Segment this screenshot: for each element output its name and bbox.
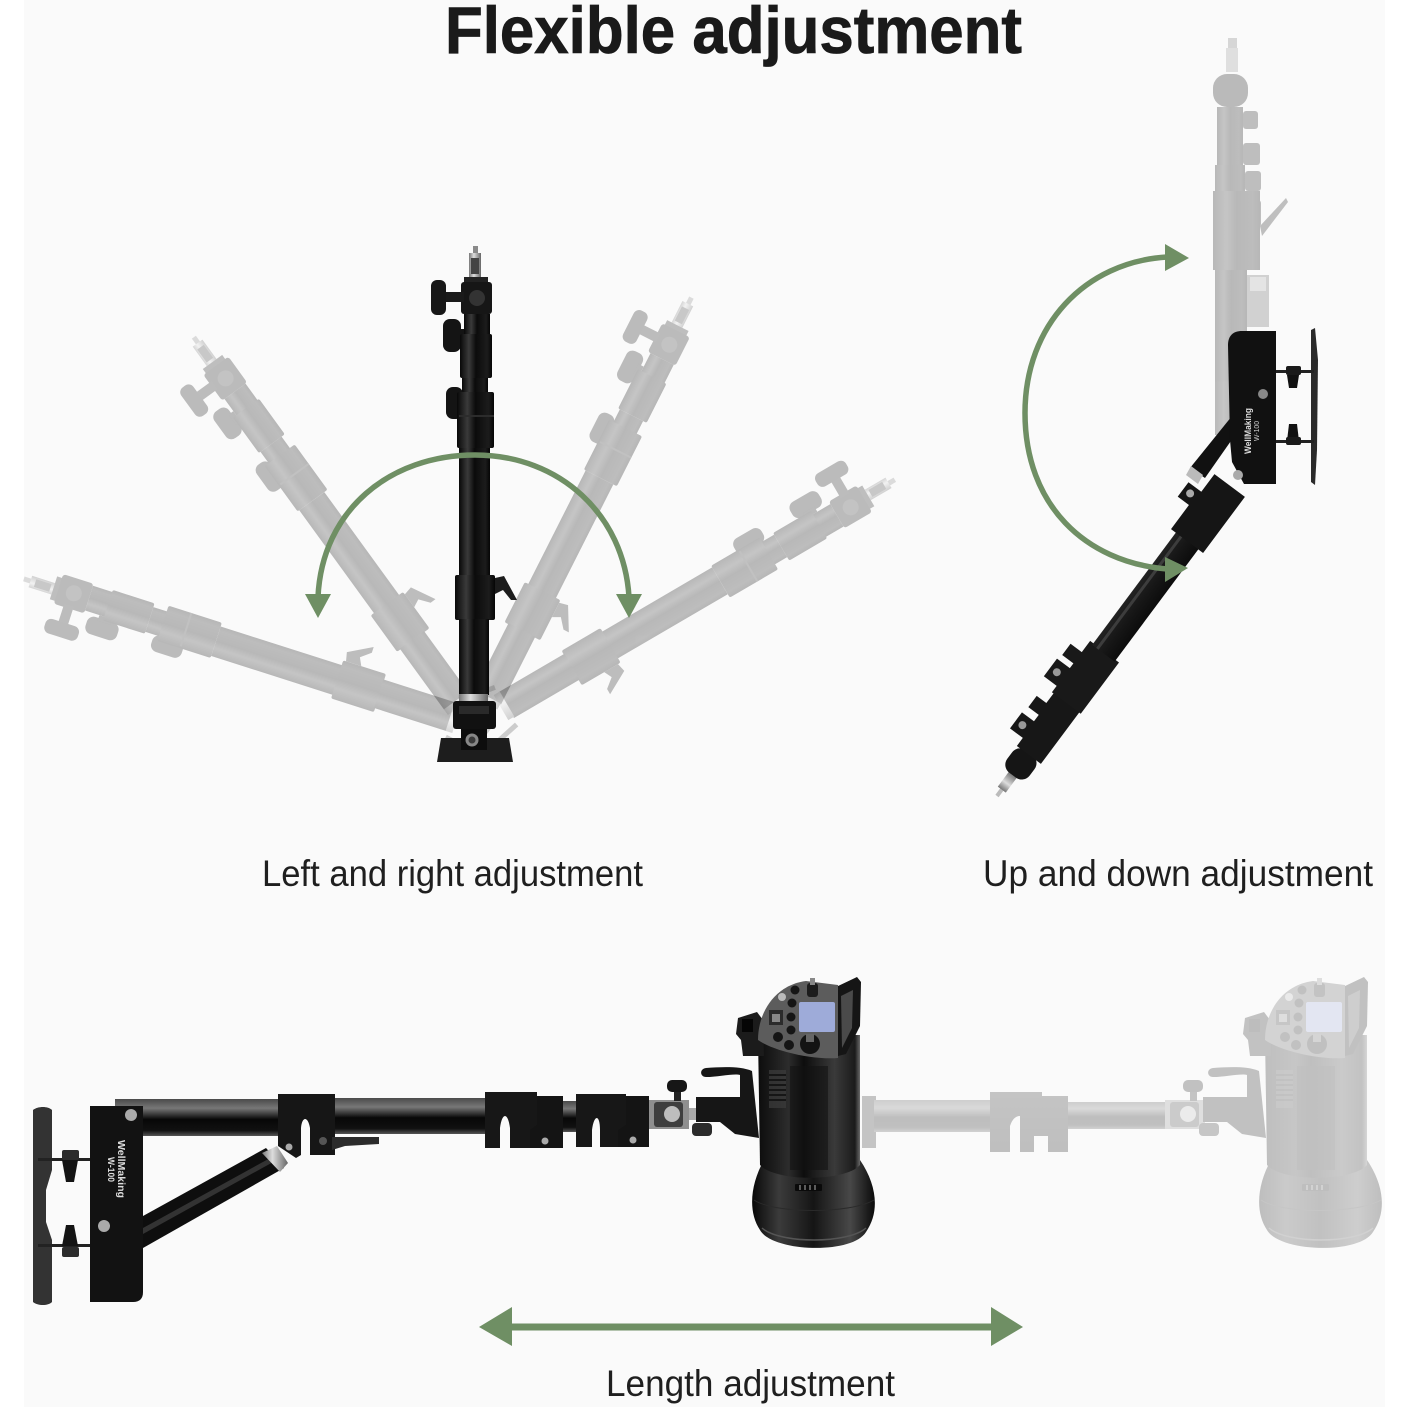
ball head — [649, 1080, 697, 1129]
diagonal brace — [1190, 416, 1240, 478]
figure: left and right adjustment — [10, 246, 916, 770]
black upright stand — [431, 246, 517, 701]
black L bracket with brand — [90, 1106, 143, 1302]
ghost upright arm — [1213, 38, 1288, 435]
model text: W-100 — [1254, 421, 1261, 441]
wall mounting plate side view — [1276, 328, 1318, 485]
arrow: length double-headed — [479, 1307, 1023, 1346]
wall plate — [33, 1107, 90, 1305]
main arm tube — [115, 1099, 280, 1136]
ghost extended arm and light — [862, 977, 1382, 1248]
grab clamp — [692, 1067, 759, 1138]
figure: length adjustment — [33, 977, 1382, 1346]
third tube — [560, 1101, 580, 1132]
arrow: up-down arc — [1025, 244, 1189, 582]
figure: up and down adjustment — [970, 38, 1318, 808]
caption: up and down: Up and down adjustment — [983, 853, 1374, 894]
brand text: WellMaking — [115, 1140, 126, 1198]
ghost stand near left — [158, 313, 495, 731]
wall base and swivel bracket — [437, 701, 513, 762]
black L bracket with brand — [1228, 331, 1276, 484]
black folded arm — [970, 465, 1245, 808]
model text: W-100 — [106, 1157, 116, 1182]
second tube — [333, 1098, 489, 1134]
diagonal brace with ferrule — [143, 1146, 288, 1248]
ghost stand near right — [447, 278, 728, 723]
brand text: WellMaking — [1243, 408, 1253, 454]
ghost stand far right — [450, 441, 916, 762]
caption: left and right: Left and right adjustment — [262, 853, 644, 894]
telescoping clamps — [485, 1092, 649, 1148]
caption: length: Length adjustment — [606, 1363, 896, 1404]
arrow: left-right arc — [305, 455, 642, 618]
silver ferrule — [1186, 466, 1203, 484]
studio light — [736, 977, 875, 1248]
ghost stand far left — [10, 539, 502, 770]
lever clamp on tube — [278, 1094, 379, 1158]
